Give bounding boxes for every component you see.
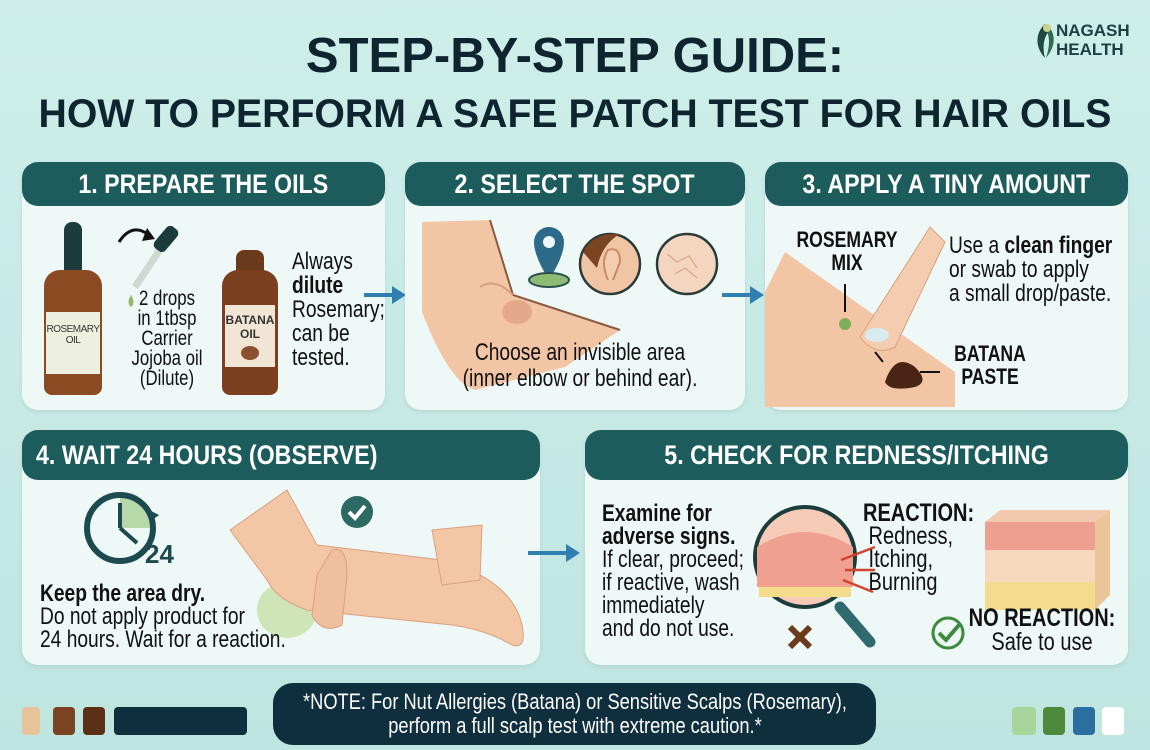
icon: green check [932,616,964,650]
text: examine: Examine for [602,500,712,527]
heading 2 [405,162,745,206]
text: reaction: Redness, [869,522,953,550]
text: reaction: Burning [869,568,938,596]
title [39,29,1111,136]
text: rosemary mix [796,227,898,275]
text: examine: adverse signs. [602,523,735,550]
logo [1037,21,1130,59]
heading 3: 3. APPLY A TINY AMOUNT [803,169,1090,199]
swatches right [1012,707,1124,735]
text: always dilute: can be [292,320,350,347]
text: 2 drops [132,287,202,390]
text: rosemary mix: MIX [831,250,863,275]
text: examine: and do not use. [602,615,734,642]
icon: rosemary bottle: OIL [66,335,80,346]
icon: skin block [985,510,1110,610]
icon: batana bottle: OIL [240,327,260,341]
text: keep dry: Keep the area dry. [40,580,205,607]
panel: 2 select [405,162,745,410]
heading 4: 4. WAIT 24 HOURS (OBSERVE) [36,440,377,470]
logo: NAGASH [1056,21,1130,40]
text: 2 drops: Carrier [141,327,193,350]
text: use a clean finger: Use a clean finger [949,232,1112,259]
icon: elbow [422,220,718,390]
icon: batana bottle: BATANA [226,313,274,327]
text: keep dry: Do not apply product for [40,603,245,630]
text: no reaction: Safe to use [991,628,1093,656]
note: perform a full scalp test with extreme caution.* [388,713,761,738]
text: 2 drops: Jojoba oil [132,347,202,370]
arrow 4 [528,551,568,555]
text: always dilute: Rosemary; [292,296,385,323]
text: batana paste: PASTE [961,364,1019,389]
text: reaction: Itching, [869,545,933,573]
text: batana paste: BATANA [954,341,1026,366]
text: choose: (inner elbow or behind ear). [463,365,697,392]
icon: clock 24 [84,492,174,569]
text: always dilute: Always [292,248,353,275]
text: 2 drops: (Dilute) [140,367,194,390]
text: use a clean finger: a small drop/paste. [949,280,1111,307]
icon: batana bottle [222,250,278,395]
heading 5 [585,430,1128,480]
icon: dropper [118,226,178,307]
icon: check [341,496,373,528]
text: examine: if reactive, wash [602,569,740,596]
arrow 1 [364,293,394,297]
text: choose: Choose an invisible area [475,339,685,366]
title: HOW TO PERFORM A SAFE PATCH TEST FOR HAIR OILS [39,92,1111,136]
text: examine: immediately [602,592,704,619]
text: always dilute: dilute [292,272,343,299]
text: reaction [863,499,974,596]
text: reaction: REACTION: [863,499,974,527]
text: choose [463,339,697,392]
text: use a clean finger [949,232,1112,307]
icon: rosemary bottle [44,222,102,395]
heading 2: 2. SELECT THE SPOT [455,169,695,199]
logo: HEALTH [1056,40,1124,59]
text: examine: If clear, proceed; [602,546,744,573]
illustration: finger [765,226,955,407]
panel: 5 check [585,430,1128,665]
panel: 3 apply [765,162,1128,410]
illustration: arms [229,489,524,646]
heading 5: 5. CHECK FOR REDNESS/ITCHING [664,440,1049,470]
icon: rosemary bottle: ROSEMARY [46,324,100,335]
icon: magnifier [753,505,876,650]
arrow 2 [722,293,752,297]
text: keep dry: 24 hours. Wait for a reaction. [40,626,286,653]
heading 3 [765,162,1128,206]
icon: clock 24: 24 [145,539,174,569]
title: STEP-BY-STEP GUIDE: [306,29,844,83]
swatches left [22,707,247,735]
note [273,683,876,745]
panel: 1 prepare [22,162,385,410]
heading 4 [22,430,540,480]
heading 1 [22,162,385,206]
heading 1: 1. PREPARE THE OILS [79,169,328,199]
text: 2 drops: 2 drops [139,287,195,310]
text: no reaction [969,604,1115,656]
text: always dilute: tested. [292,344,350,371]
text: examine [602,500,744,642]
panel: 4 wait [22,430,540,665]
text: 2 drops: in 1tbsp [138,307,196,330]
text: no reaction: NO REACTION: [969,604,1115,632]
text: rosemary mix: ROSEMARY [796,227,898,252]
text: batana paste [954,341,1026,389]
text: use a clean finger: or swab to apply [949,256,1089,283]
text: always dilute [292,248,385,371]
text: keep dry [40,580,286,653]
note: *NOTE: For Nut Allergies (Batana) or Sensitive Scalps (Rosemary), [303,689,846,714]
